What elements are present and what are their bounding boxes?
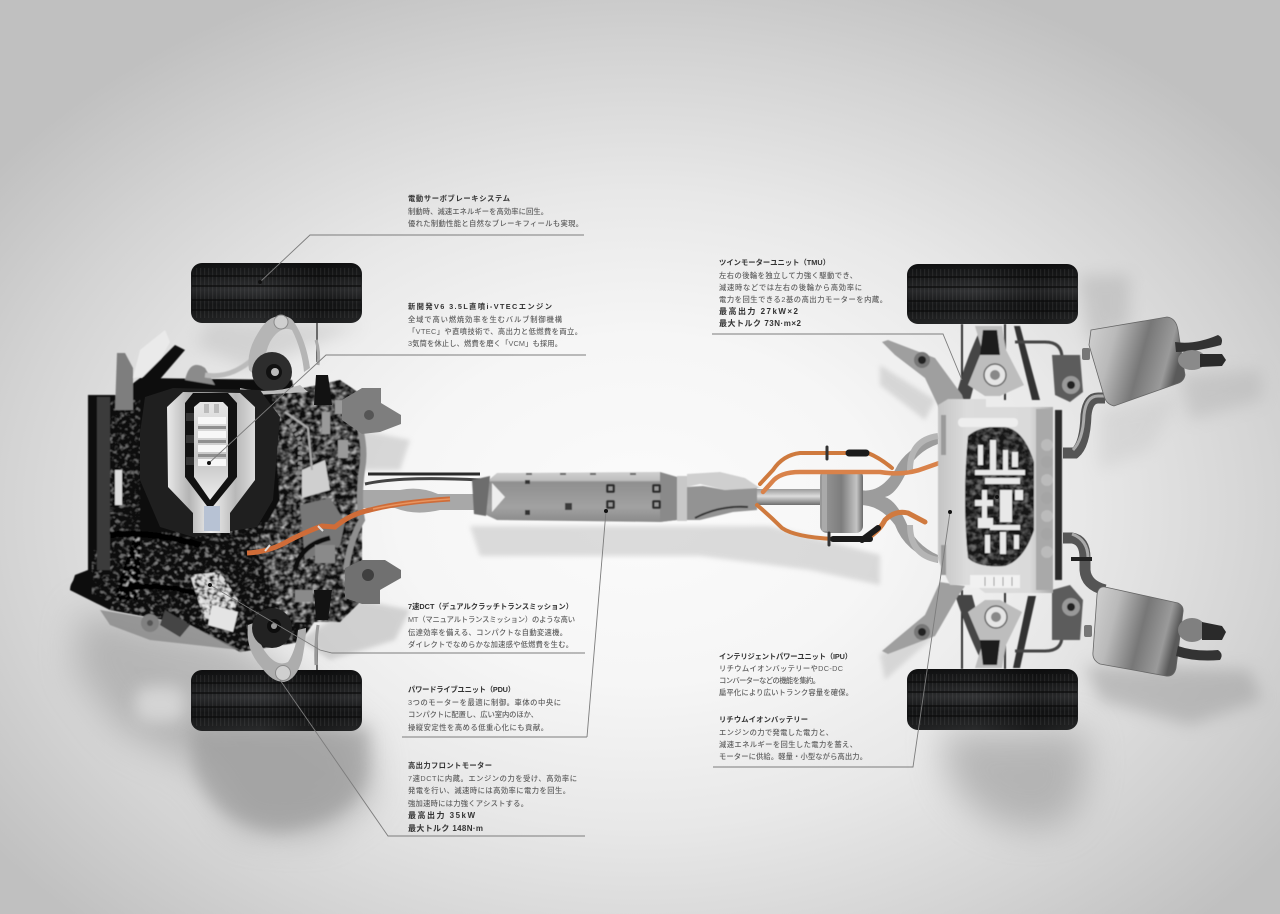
- PDU power drive unit: [472, 472, 760, 522]
- callout: front motor: 7速DCTに内蔵。エンジンの力を受け、高効率に: [408, 774, 577, 783]
- callout: TMU: 最高出力 27kW×2: [719, 306, 799, 316]
- front upper suspension arm: [240, 315, 319, 396]
- callout: lithium-ion battery: エンジンの力で発電した電力と、: [719, 728, 833, 737]
- callout: V6 engine: 「VTEC」や直噴技術で、高出力と低燃費を両立。: [408, 327, 582, 336]
- callout: IPU: コンバーターなどの機能を集約。: [719, 676, 820, 685]
- callout: IPU: リチウムイオンバッテリーやDC-DC: [719, 664, 843, 673]
- muffler bottom: [1084, 587, 1226, 676]
- callout: 7-speed DCT: ダイレクトでなめらかな加速感や低燃費を生む。: [408, 640, 573, 649]
- callout: V6 engine: [408, 302, 582, 348]
- rear tire bottom: [907, 669, 1078, 730]
- rear tire top: [907, 264, 1078, 324]
- callout: TMU: 電力を回生できる2基の高出力モーターを内蔵。: [719, 295, 887, 304]
- callout: IPU: 扁平化により広いトランク容量を確保。: [719, 688, 853, 697]
- callout: electric servo brake: 制動時、減速エネルギーを高効率に回生。: [408, 207, 548, 216]
- callout: TMU: [719, 258, 887, 328]
- callout: 7-speed DCT: MT（マニュアルトランスミッション）のような高い: [408, 615, 575, 624]
- callout: electric servo brake: 電動サーボブレーキシステム: [408, 194, 510, 203]
- callout: PDU: パワードライブユニット（PDU）: [408, 685, 515, 694]
- callout: TMU: 最大トルク 73N·m×2: [719, 318, 802, 328]
- callout: front motor: 最大トルク 148N·m: [408, 823, 483, 833]
- front tire bottom: [191, 670, 362, 731]
- rear suspension and axle parts: [882, 324, 1083, 669]
- callout: front motor: 高出力フロントモーター: [408, 761, 492, 770]
- orange high voltage cables: [757, 447, 942, 545]
- callout: 7-speed DCT: 伝達効率を備える、コンパクトな自動変速機。: [408, 628, 567, 637]
- callout: 7-speed DCT: 7速DCT（デュアルクラッチトランスミッション）: [408, 602, 573, 611]
- rear exhaust pipes: [1063, 396, 1105, 590]
- front orange cable: [247, 499, 450, 553]
- callout: front motor: 最高出力 35kW: [408, 810, 475, 820]
- leader lines and anchor dots: [207, 235, 999, 836]
- callout: lithium-ion battery: 減速エネルギーを回生した電力を蓄え、: [719, 740, 857, 749]
- engine bay mechanical mass: [70, 330, 364, 652]
- callout: PDU: コンパクトに配置し、広い室内のほか、: [408, 710, 538, 719]
- callout: electric servo brake: 優れた制動性能と自然なブレーキフィールも実現。: [408, 219, 583, 228]
- callout: IPU: インテリジェントパワーユニット（IPU）: [719, 652, 852, 661]
- muffler top: [1082, 317, 1226, 406]
- front lower suspension arm: [248, 608, 318, 682]
- rear mufflers: [1082, 317, 1226, 676]
- floor shadows: [75, 275, 1262, 835]
- callout: electric servo brake: [408, 194, 583, 228]
- callout: V6 engine: 全域で高い燃焼効率を生むバルブ制御機構: [408, 315, 563, 324]
- callout: 7-speed DCT: [408, 602, 575, 649]
- callout: TMU: 減速時などでは左右の後輪から高効率に: [719, 283, 862, 292]
- steering rack and brackets: [314, 375, 401, 620]
- callout: front motor: 発電を行い、減速時には高効率に電力を回生。: [408, 786, 570, 795]
- callout: lithium-ion battery: リチウムイオンバッテリー: [719, 715, 808, 724]
- callout: PDU: 3つのモーターを最適に制御。車体の中央に: [408, 698, 561, 707]
- callout: PDU: [408, 685, 561, 732]
- callout: front motor: 強加速時には力強くアシストする。: [408, 799, 528, 808]
- callout: PDU: 操縦安定性を高める低重心化にも貢献。: [408, 723, 548, 732]
- callout: lithium-ion battery: [719, 715, 867, 761]
- callout: lithium-ion battery: モーターに供給。軽量・小型ながら高出力。: [719, 752, 867, 761]
- callout: TMU: ツインモーターユニット（TMU）: [719, 258, 830, 267]
- callout: V6 engine: 3気筒を休止し、燃費を磨く「VCM」も採用。: [408, 339, 562, 348]
- callout: V6 engine: 新開発V6 3.5L直噴i-VTECエンジン: [408, 302, 552, 311]
- front tire top: [191, 263, 362, 323]
- callout: TMU: 左右の後輪を独立して力強く駆動でき、: [719, 271, 857, 280]
- callout: front motor: [408, 761, 577, 833]
- IPU intelligent power unit: [938, 399, 1062, 593]
- callout: IPU: [719, 652, 853, 697]
- engine cover: [140, 388, 280, 537]
- center exhaust and cat converter: [362, 436, 938, 563]
